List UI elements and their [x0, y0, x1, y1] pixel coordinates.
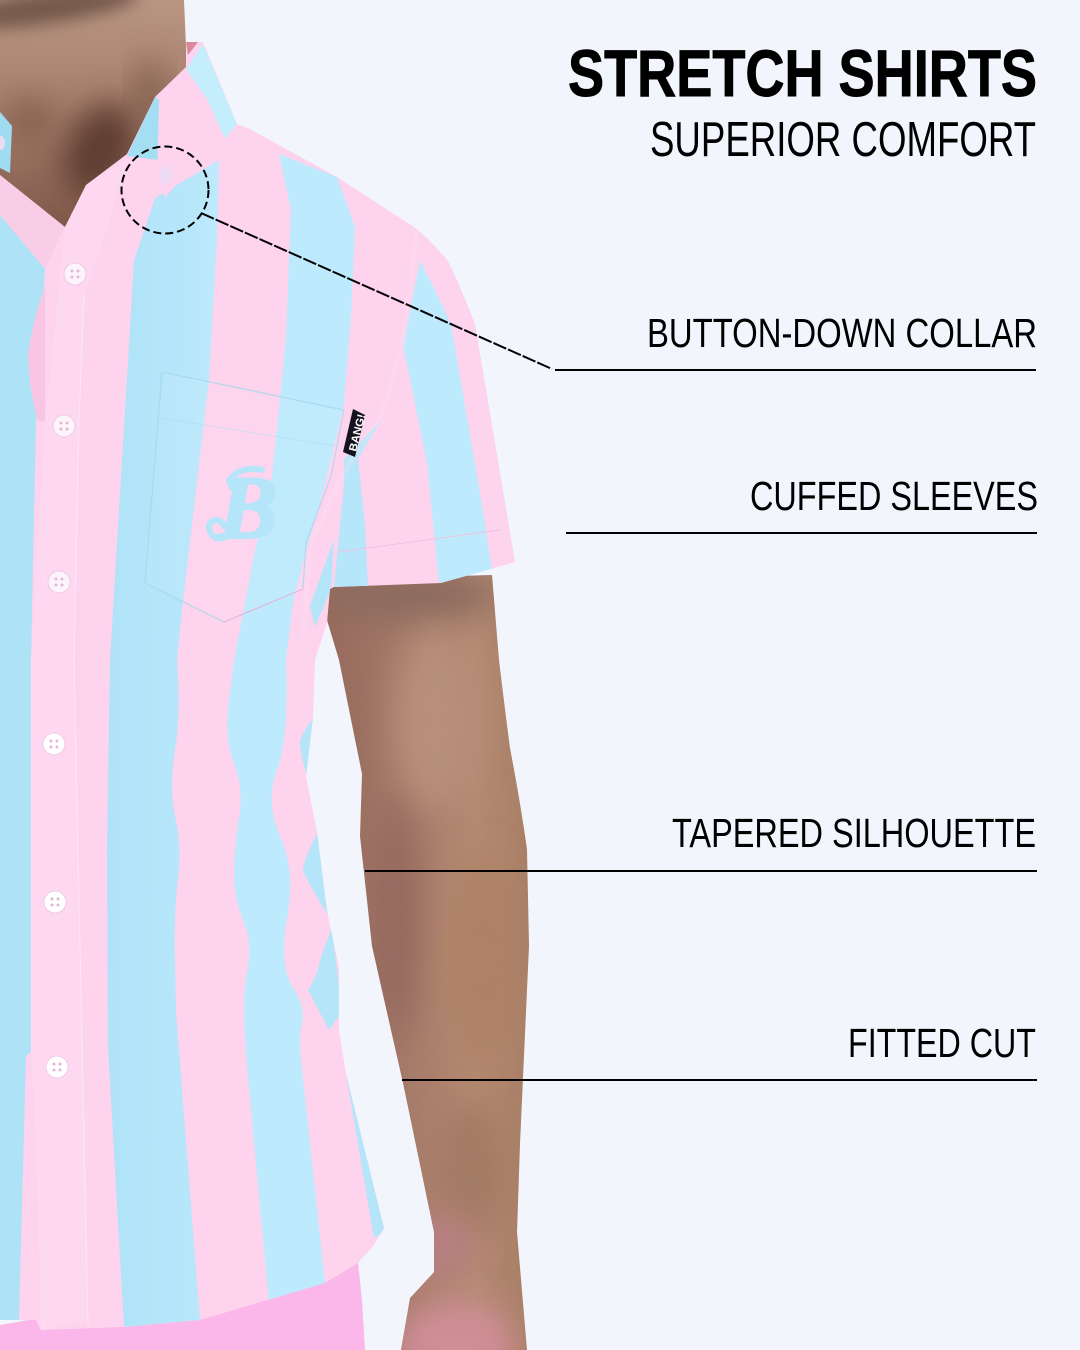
striped shirt — [0, 30, 530, 1340]
model forearm — [320, 569, 540, 1350]
collar blue band — [186, 44, 237, 139]
pocket — [145, 372, 344, 622]
pocket logo B: B — [217, 459, 278, 558]
brand tag: BANG! — [347, 413, 368, 453]
blue stripe: left front — [0, 215, 45, 1320]
neck and jaw — [0, 0, 190, 240]
shirt buttons — [43, 263, 86, 1078]
callout: collar magnifier circle — [122, 146, 208, 234]
right collar leaf — [158, 100, 175, 198]
callout: fitted cut: FITTED CUT — [848, 1020, 1036, 1066]
inner placket shade — [0, 175, 65, 227]
sleeve seam — [344, 315, 410, 477]
pink shorts — [0, 1262, 365, 1350]
left collar — [0, 112, 12, 173]
callout: collar dashed leader — [201, 213, 552, 369]
right collar blue underside — [127, 97, 160, 160]
blue stripe: centre right — [227, 154, 355, 1303]
placket — [65, 184, 88, 227]
blue stripe: inner sleeve — [334, 419, 382, 587]
placket stitching — [74, 295, 88, 1325]
collar button — [160, 166, 172, 184]
brand tag — [343, 409, 368, 457]
pink inner sliver — [28, 286, 45, 421]
shirt base pink — [0, 30, 530, 1340]
collar inner red — [186, 42, 198, 55]
blue stripe: centre left — [107, 160, 219, 1327]
blue fragments: side body — [300, 539, 390, 1238]
cuff stitching — [338, 530, 500, 552]
blue stripe: sleeve — [403, 261, 492, 583]
